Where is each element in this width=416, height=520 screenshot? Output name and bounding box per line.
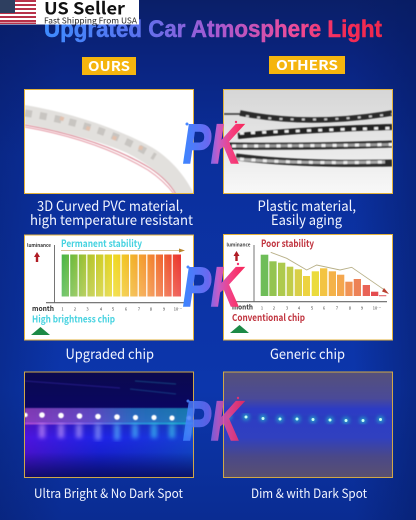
axis labels: month: 1 (261, 306, 263, 312)
axis labels: month: 7 (138, 306, 141, 312)
watermark: PK row 1: PK (183, 112, 244, 175)
watermark: PK row 2: PK (183, 255, 244, 318)
LEDs (23, 412, 191, 421)
badge: OURS: OURS (88, 55, 130, 75)
axis labels: month: 3 (86, 306, 89, 312)
caption: plastic material (258, 196, 356, 230)
panel: curved PVC strip photo (24, 90, 194, 194)
panel: dim strip photo (224, 372, 392, 478)
strip 3 (229, 144, 392, 146)
bar chart (261, 255, 386, 296)
caption: ultra bright: Ultra Bright & No Dark Spot (34, 483, 183, 502)
trend arrow (271, 252, 389, 294)
axis label: luminance: luminance (27, 242, 51, 249)
axis labels: month: 6 (125, 306, 128, 312)
light beams (39, 424, 192, 440)
title: Upgrated Car Atmosphere Light (44, 16, 382, 43)
icon: green triangle (230, 325, 249, 333)
axis labels: month: month (32, 304, 54, 314)
axis labels: month: 7 (336, 306, 339, 312)
panel: generic chip chart (224, 234, 392, 340)
caption: PVC material: 3D Curved PVC material, (37, 196, 183, 216)
strip 1 (224, 113, 392, 120)
label: conventional chip: Conventional chip (232, 310, 305, 324)
caption: PVC material: high temperature resistant (30, 210, 194, 230)
axis labels: month: 5 (112, 306, 114, 312)
axis labels: month (32, 304, 182, 314)
badge: US seller: Fast Shipping From USA (44, 16, 137, 26)
axes (46, 245, 186, 303)
badge: US seller (0, 0, 139, 26)
axis label: luminance: luminance (226, 242, 251, 248)
panel: ultra bright strip photo (23, 372, 193, 478)
axis labels: month: month (232, 302, 253, 312)
caption: plastic material: Plastic material, (258, 196, 356, 216)
icon: red up arrow (34, 252, 40, 262)
axis labels: month: 8 (349, 306, 352, 312)
panel: plastic strips photo (224, 90, 392, 194)
watermark: PK row 3: PK (183, 389, 244, 452)
axis labels: month: 3 (286, 306, 288, 312)
badge: OTHERS: OTHERS (276, 54, 338, 74)
caption: plastic material: Easily aging (271, 210, 342, 230)
trend arrow (61, 248, 185, 252)
axis labels: month: 8 (150, 306, 153, 312)
axis labels: month: 10… (174, 306, 182, 312)
axis labels: month: 4 (100, 306, 103, 312)
LEDs (226, 414, 384, 424)
axis labels: month: 6 (323, 306, 326, 312)
axis labels: month: 2 (74, 306, 77, 312)
label: high brightness chip: High brightness chip (32, 312, 115, 326)
axis labels: month: 4 (298, 306, 301, 312)
caption: upgraded chip: Upgraded chip (66, 344, 154, 364)
heading: permanent stability: Permanent stability (61, 235, 142, 250)
bar chart (62, 254, 181, 297)
axis labels: month: 10… (373, 306, 381, 312)
axes (232, 245, 387, 302)
strip 4 (236, 157, 392, 163)
panel: upgraded chip chart (24, 235, 194, 340)
axis labels: month: 2 (273, 306, 276, 312)
icon: red up arrow (234, 251, 240, 261)
caption: dim: Dim & with Dark Spot (251, 483, 367, 502)
top reflection streaks (25, 381, 176, 394)
curved strip (25, 105, 194, 194)
axis labels: month: 1 (61, 306, 64, 312)
caption: generic chip: Generic chip (270, 344, 345, 364)
icon: US flag (0, 0, 36, 24)
axis labels: month: 5 (311, 306, 313, 312)
icon: green triangle (31, 327, 50, 335)
axis labels: month: 9 (361, 306, 363, 312)
heading: poor stability: Poor stability (261, 235, 314, 250)
caption: PVC material (30, 196, 194, 230)
axis labels: month: 9 (163, 306, 165, 312)
glowing strip (25, 408, 193, 424)
dim strip (224, 416, 392, 419)
strip 2 (238, 127, 392, 136)
axis labels: month (232, 302, 381, 312)
